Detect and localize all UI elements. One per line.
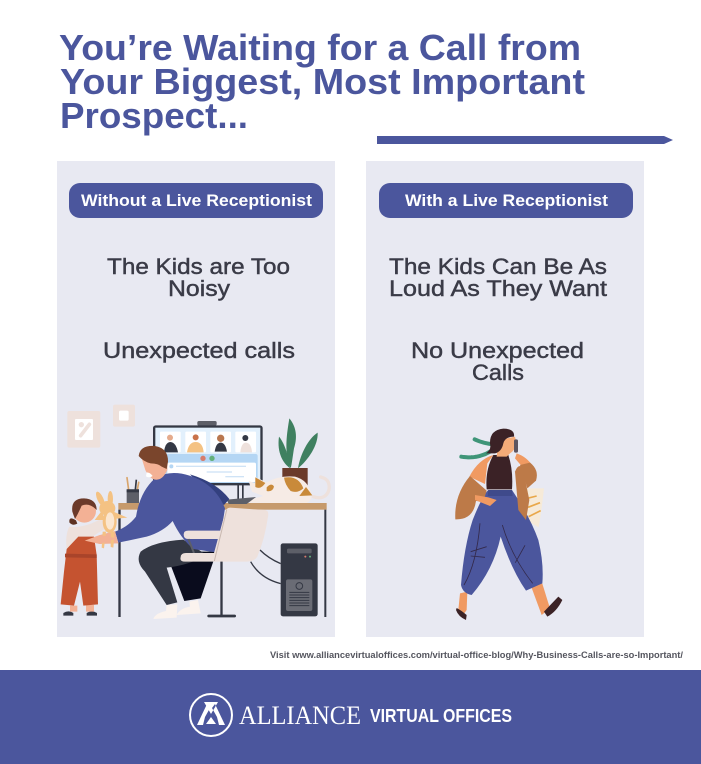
title: You’re Waiting for a Call from	[59, 27, 581, 68]
source link: Visit www.alliancevirtualoffices.com/virtual-office-blog/Why-Business-Calls-are-so-Important/	[270, 650, 684, 660]
text: the kids are too noisy	[107, 254, 290, 301]
icon: desk chair	[180, 508, 268, 562]
icon: child with toy rabbit	[61, 490, 127, 616]
text: the kids are too noisy: The Kids are Too	[107, 254, 290, 279]
badge: with a live receptionist	[379, 183, 633, 218]
text: no unexpected calls	[411, 338, 584, 385]
title: Prospect...	[60, 95, 248, 136]
icon: computer tower and cables	[251, 543, 318, 616]
icon: bag stripes	[527, 496, 541, 517]
text: the kids are too noisy: Noisy	[168, 276, 230, 301]
badge: without a live receptionist: Without a Live Receptionist	[81, 191, 312, 210]
panel: without a live receptionist	[57, 161, 335, 637]
badge: with a live receptionist: With a Live Receptionist	[405, 191, 608, 210]
footer band	[0, 670, 701, 764]
icon: desk monitor with video call	[153, 421, 263, 499]
text: unexpected calls: Unexpected calls	[103, 338, 295, 363]
icon: tote bag	[520, 467, 544, 527]
logo: alliance virtual offices: ALLIANCE	[239, 701, 361, 730]
text: no unexpected calls: Calls	[472, 360, 524, 385]
text: the kids can be as loud as they want: Loud As They Want	[389, 276, 607, 301]
text: no unexpected calls: No Unexpected	[411, 338, 584, 363]
text: the kids can be as loud as they want: The Kids Can Be As	[389, 254, 607, 279]
title: Your Biggest, Most Important	[60, 61, 585, 102]
badge: without a live receptionist	[69, 183, 323, 218]
icon: green scarf	[461, 439, 491, 457]
logo: alliance virtual offices: VIRTUAL OFFICES	[370, 706, 512, 726]
illustration: woman walking while on the phone	[455, 429, 562, 620]
icon: father in blue hoodie	[85, 446, 229, 619]
icon: wall frames	[67, 405, 135, 448]
icon: desk	[118, 503, 327, 617]
icon: potted plant	[279, 418, 318, 496]
text: the kids can be as loud as they want	[389, 254, 607, 301]
icon: woman figure	[455, 429, 562, 620]
icon: pencil holder	[127, 478, 139, 503]
logo: alliance virtual offices	[190, 694, 512, 736]
title	[59, 27, 585, 136]
illustration: father on video call with child and cat	[61, 405, 329, 619]
arrow: title underline	[377, 136, 673, 144]
icon: cat on desk	[227, 476, 329, 504]
panel: with a live receptionist	[366, 161, 644, 637]
